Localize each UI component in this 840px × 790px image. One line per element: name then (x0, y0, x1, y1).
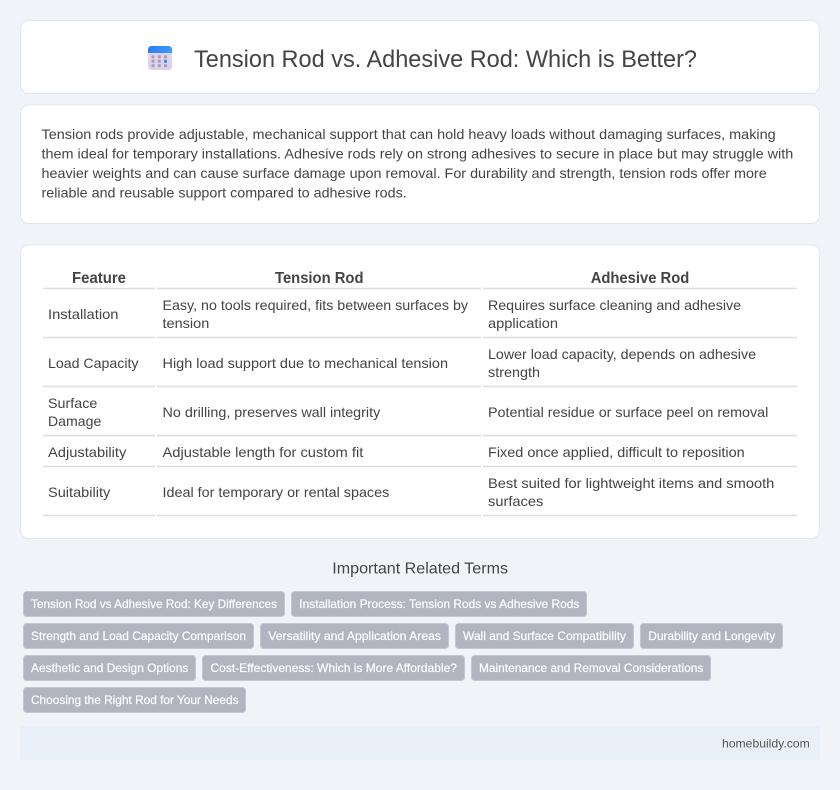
tag: key differences (24, 592, 284, 616)
text block: introduction paragraph: them ideal for temporary installations. Adhesive rods rely on strong adhesives to secure in place but may struggle with (42, 146, 793, 162)
table row: installation: tension (162, 315, 209, 331)
table row: adjustability (43, 444, 797, 467)
table row: installation: Requires surface cleaning and adhesive (488, 297, 741, 313)
tag: versatility: Versatility and Application Areas (268, 629, 441, 643)
footer site name: homebuildy.com (722, 736, 810, 750)
tag: cost-effectiveness: Cost-Effectiveness: Which is More Affordable? (210, 661, 457, 675)
tag: versatility (260, 624, 448, 648)
table row: surface damage: No drilling, preserves wall integrity (162, 404, 380, 420)
tag: durability and longevity (640, 624, 782, 648)
table row: surface damage: Surface (48, 395, 98, 411)
tag: aesthetic and design options: Aesthetic and Design Options (31, 661, 188, 675)
tag: maintenance and removal: Maintenance and Removal Considerations (479, 661, 703, 675)
table row: adjustability: Adjustable length for custom fit (162, 444, 363, 460)
text block: introduction paragraph: heavier weights and can cause surface damage upon removal. For durability and strength, tension rods offer more (42, 165, 767, 181)
panel: header (20, 20, 820, 94)
table row: installation: Installation (48, 306, 118, 322)
tag: choosing the right rod (24, 688, 246, 712)
text block: introduction paragraph: reliable and reusable support compared to adhesive rods. (42, 184, 407, 200)
tag: maintenance and removal (472, 656, 710, 680)
table row: suitability: Best suited for lightweight items and smooth (488, 475, 774, 491)
table row: installation: Easy, no tools required, fits between surfaces by (162, 297, 468, 313)
table row: load capacity: Load Capacity (48, 355, 138, 371)
tag: wall and surface compatibility: Wall and Surface Compatibility (463, 629, 626, 643)
tag: aesthetic and design options (24, 656, 196, 680)
text block: introduction paragraph: Tension rods provide adjustable, mechanical support that can hold heavy loads without damaging surfaces, making (42, 126, 776, 142)
table row: load capacity: High load support due to mechanical tension (162, 355, 448, 371)
table row: load capacity: strength (488, 364, 540, 380)
table header row: Feature (72, 270, 126, 287)
table row: installation (43, 297, 797, 338)
text block: introduction paragraph (42, 126, 793, 200)
table header row: Tension Rod (275, 270, 364, 287)
table row: suitability: surfaces (488, 493, 543, 509)
icon: calendar (148, 46, 172, 70)
table row: suitability: Suitability (48, 484, 110, 500)
tag: strength and load capacity (24, 624, 254, 648)
panel: comparison table (20, 245, 820, 538)
table row: surface damage: Potential residue or surface peel on removal (488, 404, 768, 420)
tag: strength and load capacity: Strength and Load Capacity Comparison (31, 629, 246, 643)
table row: surface damage (43, 395, 797, 436)
tag: cost-effectiveness (202, 656, 464, 680)
table row: adjustability: Adjustability (48, 444, 126, 460)
title: Tension Rod vs. Adhesive Rod: Which is Better? (194, 46, 697, 73)
tag: key differences: Tension Rod vs Adhesive Rod: Key Differences (31, 597, 277, 611)
table row: load capacity (43, 346, 797, 387)
footer (20, 726, 820, 760)
table row: surface damage: Damage (48, 413, 102, 429)
heading: important related terms: Important Related Terms (332, 560, 508, 578)
panel: introduction (20, 105, 820, 224)
table row: load capacity: Lower load capacity, depends on adhesive (488, 346, 756, 362)
tag: wall and surface compatibility (456, 624, 634, 648)
tag: installation process: Installation Process: Tension Rods vs Adhesive Rods (299, 597, 579, 611)
tag: durability and longevity: Durability and Longevity (648, 629, 775, 643)
table row: suitability: Ideal for temporary or rental spaces (162, 484, 389, 500)
table row: installation: application (488, 315, 558, 331)
table row: adjustability: Fixed once applied, difficult to reposition (488, 444, 745, 460)
table row: suitability (43, 475, 797, 516)
table header row (43, 270, 797, 289)
tag: choosing the right rod: Choosing the Right Rod for Your Needs (31, 693, 238, 707)
related term tags (24, 592, 782, 712)
tag: installation process (292, 592, 586, 616)
table header row: Adhesive Rod (591, 270, 689, 287)
